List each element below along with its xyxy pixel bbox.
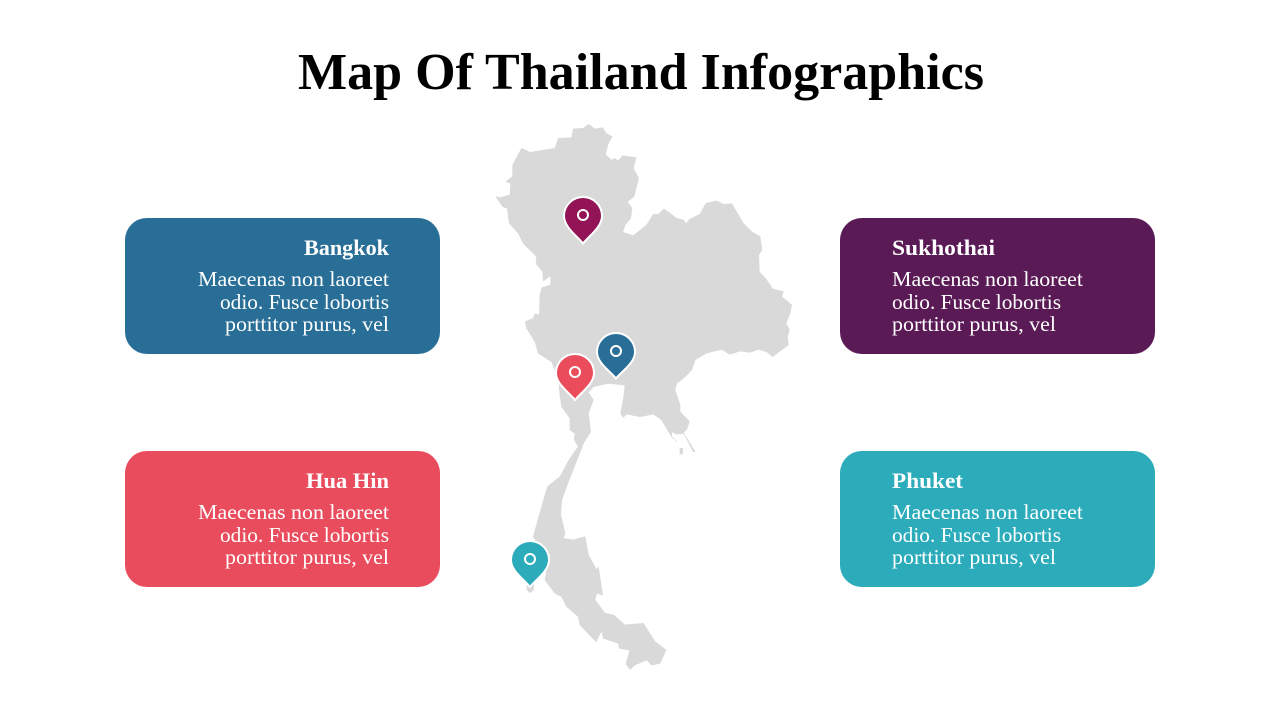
panel: Bangkok: Bangkok xyxy=(304,235,390,260)
panel: Hua Hin xyxy=(125,451,440,587)
panel: Sukhothai: odio. Fusce lobortis xyxy=(892,290,1061,314)
pin: Sukhothai xyxy=(564,197,602,244)
panel: Bangkok: porttitor purus, vel xyxy=(225,312,389,336)
panel: Sukhothai: Sukhothai xyxy=(892,235,995,260)
map of Thailand xyxy=(496,124,792,669)
panel: Sukhothai: porttitor purus, vel xyxy=(892,312,1056,336)
panel: Phuket xyxy=(840,451,1155,587)
panel: Sukhothai xyxy=(840,218,1155,354)
title: Map Of Thailand Infographics xyxy=(298,44,984,101)
panel: Phuket: porttitor purus, vel xyxy=(892,545,1056,569)
panel: Phuket: Maecenas non laoreet xyxy=(892,500,1083,524)
panel: Hua Hin: Maecenas non laoreet xyxy=(198,500,389,524)
panel: Hua Hin: porttitor purus, vel xyxy=(225,545,389,569)
pin: Bangkok xyxy=(597,333,635,378)
panel: Bangkok: Maecenas non laoreet xyxy=(198,267,389,291)
panel: Hua Hin: Hua Hin xyxy=(306,468,389,493)
pin: Phuket xyxy=(511,541,549,587)
panel: Hua Hin: odio. Fusce lobortis xyxy=(220,523,389,547)
panel: Bangkok xyxy=(125,218,440,354)
panel: Phuket: Phuket xyxy=(892,468,964,493)
panel: Phuket: odio. Fusce lobortis xyxy=(892,523,1061,547)
pin: Hua Hin xyxy=(556,354,594,400)
panel: Bangkok: odio. Fusce lobortis xyxy=(220,290,389,314)
panel: Sukhothai: Maecenas non laoreet xyxy=(892,267,1083,291)
